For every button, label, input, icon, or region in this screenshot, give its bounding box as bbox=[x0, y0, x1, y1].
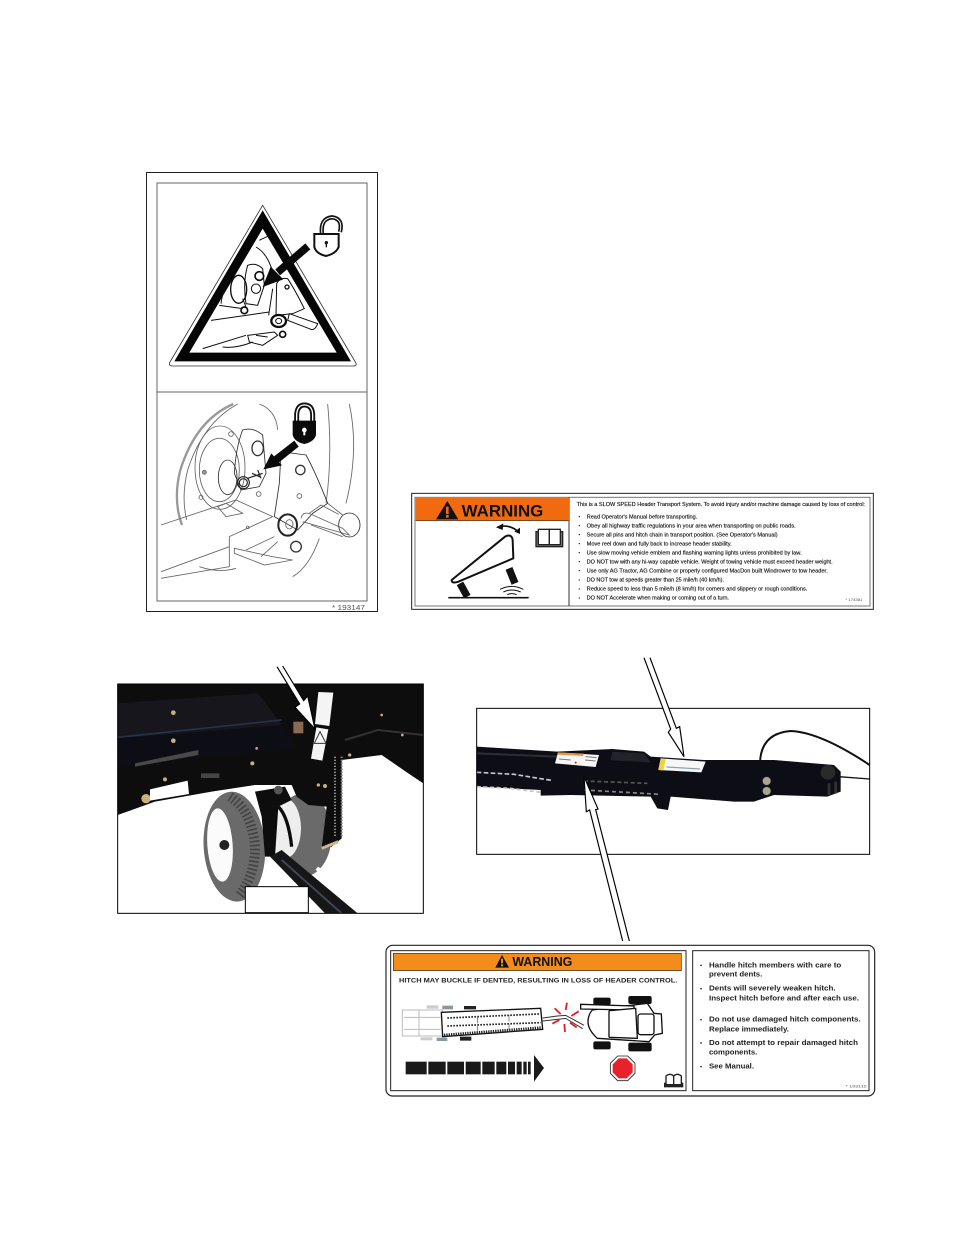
icon: hitch pin bbox=[237, 470, 263, 489]
illustration: header towed by tractor bbox=[402, 997, 662, 1051]
warning instructions text: Reduce speed to less than 5 mile/h (8 km/h) for corners and slippery or rough conditions. bbox=[587, 587, 807, 593]
warning instructions text: DO NOT tow at speeds greater than 25 mile/h (40 km/h). bbox=[587, 578, 724, 584]
hitch handling instructions text: Dents will severely weaken hitch. bbox=[709, 984, 836, 993]
warning instructions text: Use slow moving vehicle emblem and flashing warning lights unless prohibited by law. bbox=[587, 550, 802, 556]
warning headline: HITCH MAY BUCKLE IF DENTED, RESULTING IN LOSS OF HEADER CONTROL. bbox=[399, 977, 677, 984]
header frame bbox=[118, 684, 423, 848]
icon: manual book bbox=[665, 1074, 683, 1087]
hitch handling instructions text: * 193110 bbox=[846, 1084, 867, 1088]
warning instructions text: Secure all pins and hitch chain in transport position. (See Operator's Manual) bbox=[587, 532, 778, 538]
illustration: locked hub bbox=[161, 404, 360, 578]
progress arrow bbox=[406, 1055, 544, 1082]
part number: 193147: * 193147 bbox=[332, 605, 365, 612]
warning instructions text: This is a SLOW SPEED Header Transport System. To avoid injury and/or machine damage caused by loss of control: bbox=[577, 502, 865, 508]
photo: header hitch and transport wheels bbox=[118, 684, 423, 917]
hitch handling instructions text bbox=[700, 960, 867, 1088]
panel: hitch damage warning decal bbox=[386, 945, 875, 1096]
warning header bbox=[416, 498, 569, 521]
hitch handling instructions text: Replace immediately. bbox=[709, 1024, 789, 1033]
line art: hub in triangle bbox=[203, 235, 318, 349]
hitch tube body bbox=[477, 747, 841, 810]
icon: closed padlock bbox=[293, 405, 316, 444]
decal: warning on hitch bbox=[555, 752, 599, 767]
warning instructions text: * 174381 bbox=[845, 598, 863, 602]
cable bbox=[760, 731, 870, 779]
arrow: callout from hitch warning decal bbox=[584, 777, 629, 941]
warning instructions text: Move reel down and fully back to increase header stability. bbox=[587, 541, 732, 547]
bent hitch bbox=[543, 1015, 584, 1029]
warning instructions text: Read Operator's Manual before transporting. bbox=[587, 514, 697, 520]
icon: unlocked warning triangle bbox=[169, 205, 356, 366]
rear tyre bbox=[118, 684, 423, 917]
hitch decals bbox=[311, 692, 333, 761]
tractor bbox=[581, 997, 662, 1051]
icon: tipping header trailer bbox=[448, 523, 529, 598]
warning instructions text: DO NOT Accelerate when making or coming out of a turn. bbox=[587, 596, 729, 602]
warning header: WARNING bbox=[512, 955, 572, 969]
warning instructions text: Obey all highway traffic regulations in your area when transporting on public roads. bbox=[587, 523, 796, 529]
hitch handling instructions text: Do not attempt to repair damaged hitch bbox=[709, 1038, 859, 1047]
white decal on header bbox=[150, 781, 189, 801]
icon: manual book bbox=[536, 529, 563, 547]
hitch handling instructions text: Handle hitch members with care to bbox=[709, 960, 842, 969]
warning header bbox=[393, 953, 681, 971]
chain bbox=[477, 772, 661, 794]
axle bbox=[255, 787, 292, 857]
icon: open padlock bbox=[314, 217, 341, 256]
warning instructions text: Use only AG Tractor, AG Combine or properly configured MacDon built Windrower to tow header. bbox=[587, 568, 828, 574]
front tyre bbox=[204, 792, 265, 902]
arrow: to hitch pin bbox=[263, 441, 299, 469]
warning header: WARNING bbox=[462, 502, 543, 521]
hitch handling instructions text: Do not use damaged hitch components. bbox=[709, 1015, 861, 1024]
hitch handling instructions text: components. bbox=[709, 1048, 757, 1057]
ghosted header bbox=[402, 1005, 453, 1041]
panel: lock hub decal bbox=[146, 172, 378, 612]
photo: hitch tube with decals bbox=[477, 708, 870, 854]
arrow: to hub pin bbox=[263, 243, 310, 287]
white callout box bbox=[245, 887, 308, 913]
warning instructions text bbox=[577, 502, 865, 602]
arrow: callout to hitch decal on left photo bbox=[277, 666, 315, 729]
panel: slow speed transport warning decal bbox=[412, 493, 873, 609]
icon: stop sign bbox=[610, 1056, 635, 1081]
hitch handling instructions text: prevent dents. bbox=[709, 970, 762, 979]
hitch handling instructions text: Inspect hitch before and after each use. bbox=[709, 993, 859, 1002]
impact sparks bbox=[552, 1003, 579, 1032]
arrow: callout to transport decal bbox=[644, 658, 684, 757]
warning instructions text: DO NOT tow with any hi-way capable vehicle. Weight of towing vehicle must exceed header weight. bbox=[587, 559, 833, 565]
bolts bbox=[762, 777, 771, 795]
hitch tube bbox=[270, 850, 362, 917]
header bbox=[441, 1008, 543, 1037]
hitch handling instructions text: See Manual. bbox=[709, 1062, 754, 1071]
decal: transport instructions on hitch bbox=[658, 758, 706, 772]
